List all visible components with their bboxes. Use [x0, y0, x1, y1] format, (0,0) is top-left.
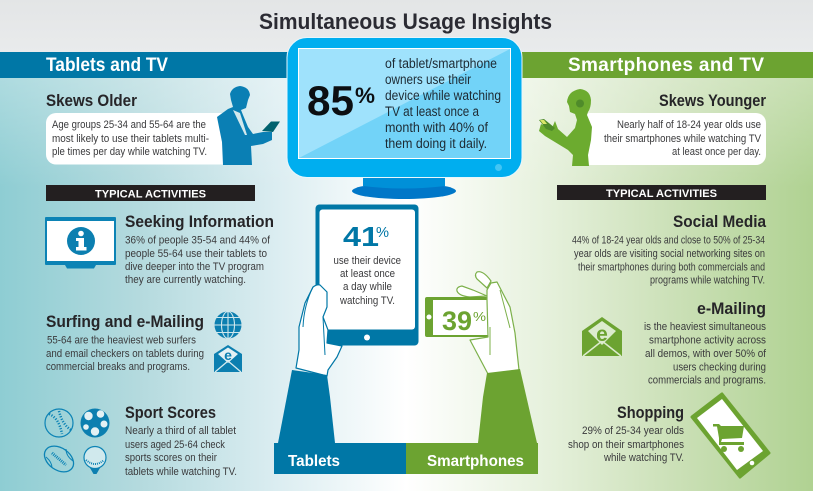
legend: tablets: Tablets: [288, 453, 340, 470]
legend: smartphones: Smartphones: [427, 453, 524, 470]
activity: seeking information: [45, 213, 274, 286]
left header band: [0, 52, 288, 78]
39 percent statistic: %: [473, 309, 486, 324]
activity: surfing and e-mailing: Surfing and e-Mailing: [46, 313, 204, 331]
activity: shopping: shop on their smartphones: [568, 439, 684, 451]
skews older callout: Age groups 25-34 and 55-64 are the: [52, 119, 206, 131]
skews older callout: [46, 113, 236, 164]
icon: globe: [214, 312, 242, 338]
tv statement: them doing it daily.: [385, 136, 487, 151]
skews older callout: most likely to use their tablets multi-: [52, 133, 209, 145]
icon: envelope: e: [596, 323, 608, 346]
tv statement: TV at least once a: [385, 104, 479, 119]
activity: sport scores: Nearly a third of all tablet: [125, 425, 236, 437]
tablet statement: watching TV.: [339, 295, 395, 307]
activity: social media: their smartphones during both commercials and: [578, 262, 765, 274]
typical activities bar: [557, 185, 766, 200]
tv power light: [495, 164, 502, 171]
skews younger callout: Nearly half of 18-24 year olds use: [617, 119, 761, 131]
41 percent statistic: [343, 221, 389, 252]
tv statement: owners use their: [385, 72, 471, 87]
tablet device: [316, 204, 418, 346]
tv statement: of tablet/smartphone: [385, 56, 497, 71]
activity: shopping: Shopping: [617, 404, 684, 422]
tablet illustration: [278, 204, 418, 443]
tv statement: month with 40% of: [385, 120, 488, 135]
85 percent statistic: [307, 77, 375, 124]
smartphone illustration: [425, 272, 537, 443]
activity: e-mailing: users checking during: [673, 362, 766, 374]
typical activities bar: TYPICAL ACTIVITIES: [606, 188, 717, 200]
activity: seeking information: they are currently watching.: [125, 274, 246, 286]
85 percent statistic: 85: [307, 77, 354, 124]
skews older heading: Skews Older: [46, 92, 138, 110]
tablet statement: use their device: [334, 255, 401, 267]
activity: sport scores: sports scores on their: [125, 452, 217, 464]
right hand back fingers: [457, 286, 487, 297]
right hand: [470, 272, 519, 374]
icon: tv with info symbol: [45, 217, 116, 268]
activity: e-mailing: smartphone activity across: [649, 334, 766, 346]
activity: surfing and e-mailing: commercial breaks and programs.: [46, 361, 190, 373]
left hand: [296, 285, 342, 376]
activity: e-mailing: commercials and programs.: [648, 374, 766, 386]
activity: shopping: 29% of 25-34 year olds: [582, 425, 684, 437]
smartphone device: [425, 297, 490, 337]
icon: envelope: [214, 345, 242, 372]
icon: smartphone with shopping cart: [692, 394, 769, 477]
tablet statement: [334, 255, 401, 307]
activity: sport scores: tablets while watching TV.: [125, 466, 237, 478]
activity: sport scores: users aged 25-64 check: [125, 439, 225, 451]
activity: surfing and e-mailing: [46, 312, 242, 373]
activity: e-mailing: is the heaviest simultaneous: [644, 321, 766, 333]
tablet statement: at least once: [340, 268, 395, 280]
activity: sport scores: [40, 404, 237, 478]
title: Simultaneous Usage Insights: [259, 9, 552, 34]
right header band: [522, 52, 813, 78]
activity: e-mailing: e-Mailing: [697, 300, 766, 318]
legend: smartphones: [406, 443, 538, 474]
activity: e-mailing: all demos, with over 50% of: [645, 348, 767, 360]
icon: golf ball: [84, 446, 106, 474]
41 percent statistic: 41: [343, 221, 379, 252]
activity: social media: 44% of 18-24 year olds and close to 50% of 25-34: [572, 234, 765, 246]
activity: seeking information: people 55-64 use their tablets to: [125, 248, 267, 260]
left header band: Tablets and TV: [46, 55, 168, 76]
skews younger callout: [580, 113, 766, 165]
typical activities bar: [46, 185, 255, 201]
tv screen: [298, 48, 511, 159]
tv stand: [352, 178, 456, 199]
activity: surfing and e-mailing: and email checkers on tablets during: [46, 348, 204, 360]
tablet statement: a day while: [343, 281, 392, 293]
skews younger callout: their smartphones while watching TV: [604, 133, 762, 145]
activity: surfing and e-mailing: 55-64 are the heaviest web surfers: [47, 334, 196, 346]
activity: seeking information: Seeking Information: [125, 213, 274, 231]
activity: sport scores: Sport Scores: [125, 404, 216, 422]
skews younger callout: at least once per day.: [672, 146, 761, 158]
icon: soccer ball: [80, 408, 110, 438]
activity: seeking information: dive deeper into the TV program: [125, 261, 264, 273]
left sleeve: [278, 370, 335, 443]
icon: businessman with tablet: [217, 86, 280, 165]
41 percent statistic: %: [376, 224, 389, 241]
icon: american football: [40, 441, 78, 477]
tv statement: device while watching: [385, 88, 501, 103]
panel: smartphones and TV: [522, 52, 813, 477]
activity: social media: [572, 213, 767, 286]
85 percent statistic: %: [355, 83, 375, 108]
tv body: [287, 38, 522, 178]
39 percent statistic: [442, 306, 486, 336]
activity: social media: programs while watching TV.: [650, 274, 765, 286]
icon: baseball: [45, 409, 73, 437]
icon: envelope: e: [224, 347, 232, 363]
tv monitor: [287, 38, 522, 199]
activity: e-mailing: [582, 300, 767, 386]
right sleeve: [478, 369, 537, 443]
right header band: Smartphones and TV: [568, 55, 764, 76]
panel: tablets and TV: [0, 52, 288, 478]
tv statement: [385, 56, 501, 151]
legend: tablets: [274, 443, 406, 474]
icon: young person with smartphone: [539, 89, 592, 166]
icon: envelope: [582, 317, 622, 356]
39 percent statistic: 39: [442, 306, 472, 336]
activity: social media: Social Media: [673, 213, 767, 231]
activity: shopping: [568, 394, 769, 477]
activity: social media: year olds are visiting social networking sites on: [574, 248, 765, 260]
skews older callout: ple times per day while watching TV.: [52, 146, 207, 158]
activity: shopping: while watching TV.: [603, 452, 684, 464]
activity: seeking information: 36% of people 35-54 and 44% of: [125, 234, 271, 246]
skews younger heading: Skews Younger: [659, 92, 767, 110]
typical activities bar: TYPICAL ACTIVITIES: [95, 188, 206, 200]
